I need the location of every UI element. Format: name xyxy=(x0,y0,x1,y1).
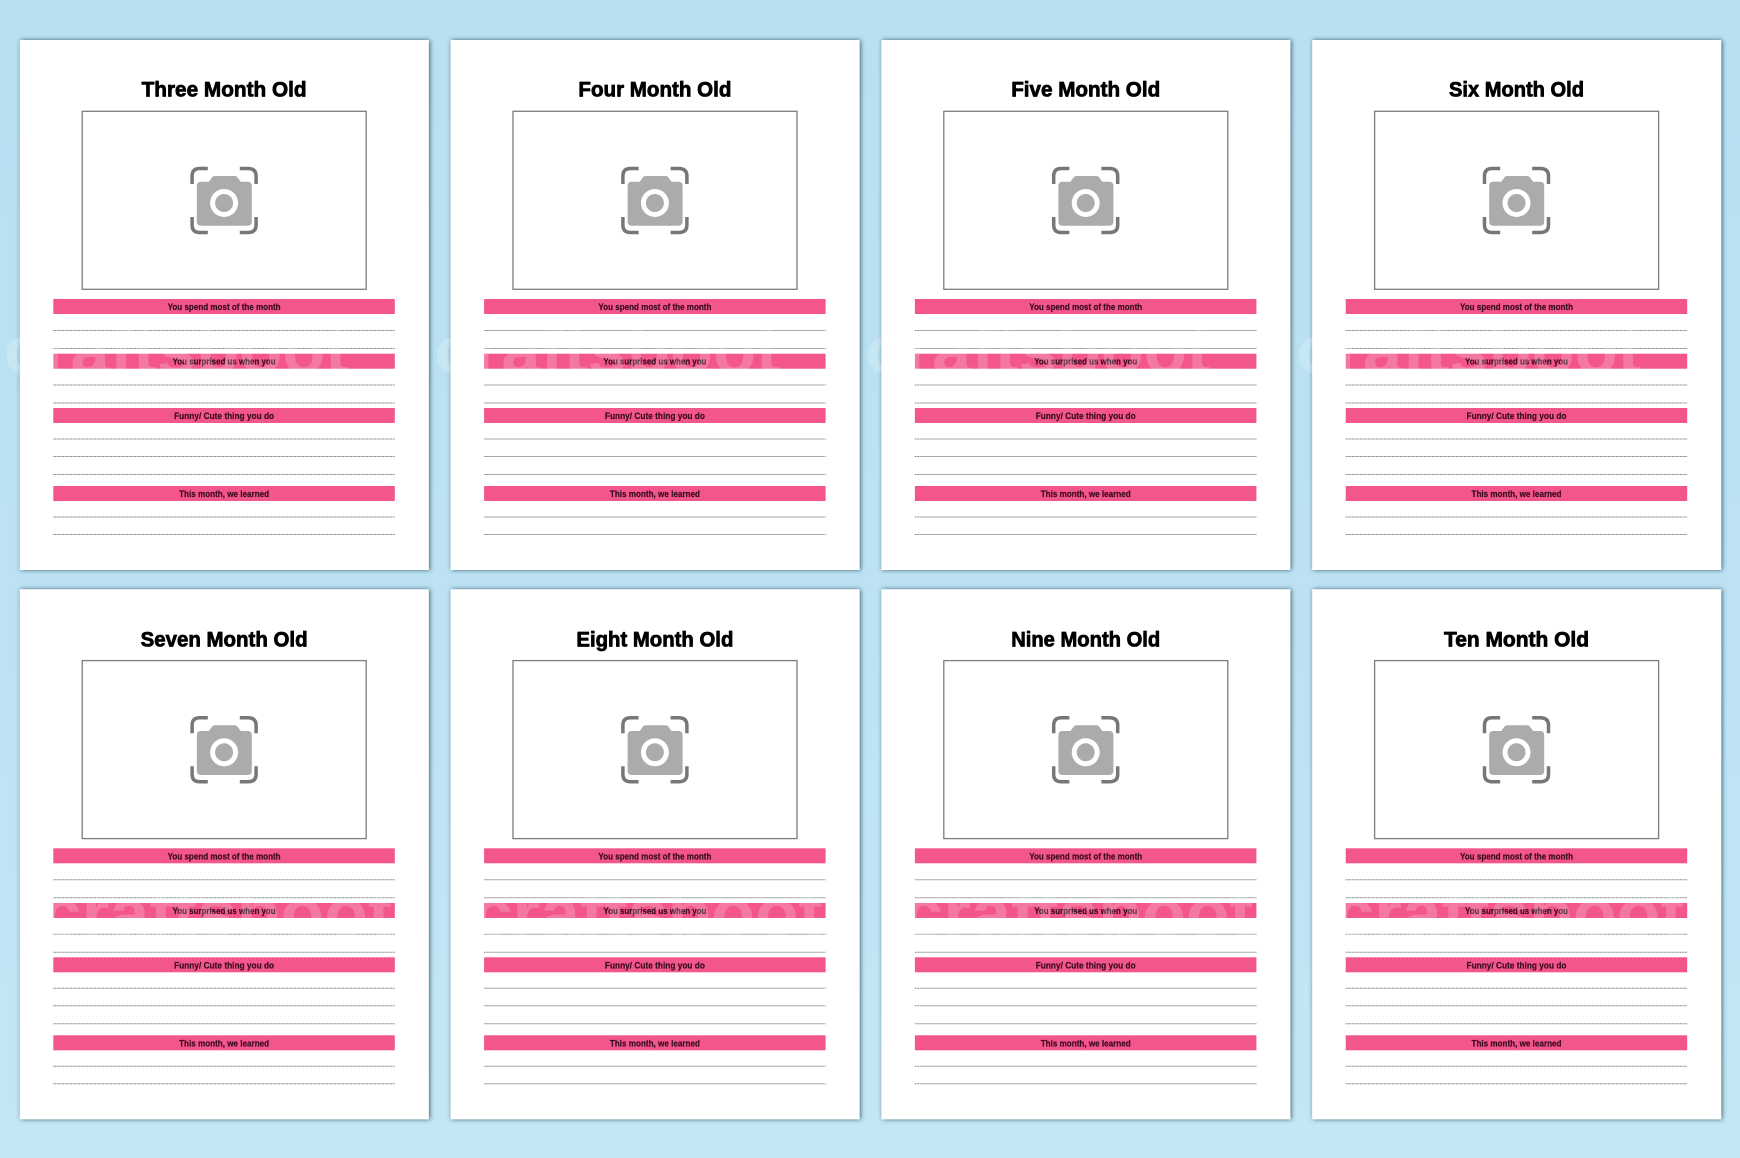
heading: Seven Month Old xyxy=(141,627,308,651)
writing lines xyxy=(53,330,395,348)
section bar: funny or cute thing xyxy=(915,408,1256,423)
section bar: this month we learned: This month, we learned xyxy=(610,1038,700,1049)
watermark: craftsboot xyxy=(4,313,349,387)
section bar: you surprised us when you xyxy=(53,903,395,918)
photo frame xyxy=(513,111,797,289)
section bar: you spend most of the month xyxy=(1346,299,1687,314)
writing lines xyxy=(1346,934,1687,952)
photo frame xyxy=(82,661,366,839)
section bar: funny or cute thing xyxy=(1346,408,1687,423)
section bar: you spend most of the month xyxy=(915,848,1256,863)
section bar: funny or cute thing: Funny/ Cute thing you do xyxy=(174,960,274,971)
section bar: you spend most of the month: You spend most of the month xyxy=(1029,302,1142,313)
section bar: you surprised us when you: You surprised us when you xyxy=(173,906,276,917)
writing lines xyxy=(915,330,1256,348)
writing lines xyxy=(484,439,826,474)
heading: Three Month Old xyxy=(142,78,307,102)
section bar: this month we learned xyxy=(1346,1035,1687,1050)
icon: camera xyxy=(1484,168,1548,232)
writing lines xyxy=(53,934,395,952)
section bar: you surprised us when you: You surprised us when you xyxy=(1465,357,1568,368)
writing lines xyxy=(915,988,1256,1024)
section bar: funny or cute thing: Funny/ Cute thing you do xyxy=(1466,960,1567,971)
section bar: you spend most of the month: You spend most of the month xyxy=(1460,851,1573,862)
writing lines xyxy=(1346,988,1687,1024)
section bar: this month we learned: This month, we learned xyxy=(1471,489,1562,500)
section bar: funny or cute thing: Funny/ Cute thing you do xyxy=(1036,411,1136,422)
icon: camera xyxy=(192,168,256,232)
writing lines xyxy=(915,934,1256,952)
writing lines xyxy=(1346,517,1687,534)
writing lines xyxy=(1346,439,1687,474)
watermark: craftsboot xyxy=(1334,875,1684,949)
section bar: funny or cute thing xyxy=(484,957,826,972)
heading: Nine Month Old xyxy=(1011,627,1160,651)
section bar: you surprised us when you xyxy=(915,354,1256,369)
section bar: funny or cute thing xyxy=(1346,957,1687,972)
section bar: this month we learned: This month, we learned xyxy=(610,489,700,500)
section bar: this month we learned xyxy=(484,1035,826,1050)
icon: camera xyxy=(192,718,256,782)
section bar: this month we learned xyxy=(915,486,1256,501)
section bar: you spend most of the month: You spend most of the month xyxy=(1029,851,1142,862)
watermark: craftsboot xyxy=(473,875,823,949)
section bar: this month we learned: This month, we learned xyxy=(179,489,269,500)
section bar: you spend most of the month: You spend most of the month xyxy=(168,302,281,313)
writing lines xyxy=(1346,1066,1687,1084)
panel: Seven Month Old page xyxy=(20,589,429,1119)
section bar: this month we learned xyxy=(53,1035,395,1050)
photo frame xyxy=(513,661,797,839)
section bar: you spend most of the month xyxy=(1346,848,1687,863)
writing lines xyxy=(484,517,826,534)
writing lines xyxy=(53,439,395,474)
section bar: funny or cute thing: Funny/ Cute thing you do xyxy=(1466,411,1567,422)
panel: Ten Month Old page xyxy=(1312,589,1721,1119)
section bar: you spend most of the month xyxy=(484,299,826,314)
writing lines xyxy=(53,880,395,898)
section bar: you surprised us when you: You surprised us when you xyxy=(1465,906,1568,917)
section bar: this month we learned xyxy=(1346,486,1687,501)
writing lines xyxy=(1346,880,1687,898)
section bar: you surprised us when you xyxy=(1346,354,1687,369)
watermark: craftsboot xyxy=(435,313,780,387)
writing lines xyxy=(484,988,826,1024)
writing lines xyxy=(915,517,1256,534)
photo frame xyxy=(1375,111,1659,289)
watermark: craftsboot xyxy=(903,875,1253,949)
section bar: funny or cute thing xyxy=(53,957,395,972)
section bar: this month we learned xyxy=(915,1035,1256,1050)
section bar: this month we learned: This month, we learned xyxy=(1041,1038,1131,1049)
writing lines xyxy=(53,1066,395,1084)
photo frame xyxy=(944,111,1228,289)
section bar: you surprised us when you: You surprised us when you xyxy=(603,906,707,917)
section bar: you spend most of the month: You spend most of the month xyxy=(1460,302,1573,313)
writing lines xyxy=(484,1066,826,1084)
heading: Ten Month Old xyxy=(1444,627,1589,651)
watermark: craftsboot xyxy=(865,313,1210,387)
icon: camera xyxy=(1054,168,1118,232)
photo frame xyxy=(944,661,1228,839)
panel: Five Month Old page xyxy=(865,40,1290,570)
writing lines xyxy=(53,385,395,403)
writing lines xyxy=(53,517,395,534)
watermark: craftsboot xyxy=(1296,313,1641,387)
section bar: you surprised us when you xyxy=(53,354,395,369)
heading: Eight Month Old xyxy=(576,627,733,651)
section bar: funny or cute thing: Funny/ Cute thing you do xyxy=(605,411,705,422)
section bar: you spend most of the month: You spend most of the month xyxy=(598,302,712,313)
section bar: you spend most of the month xyxy=(53,848,395,863)
panel: Eight Month Old page xyxy=(451,589,860,1119)
writing lines xyxy=(53,988,395,1024)
panel: Four Month Old page xyxy=(435,40,860,570)
writing lines xyxy=(915,1066,1256,1084)
writing lines xyxy=(1346,330,1687,348)
section bar: funny or cute thing xyxy=(53,408,395,423)
writing lines xyxy=(484,330,826,348)
section bar: funny or cute thing: Funny/ Cute thing you do xyxy=(174,411,274,422)
watermark: craftsboot xyxy=(42,875,392,949)
section bar: funny or cute thing xyxy=(484,408,826,423)
writing lines xyxy=(915,439,1256,474)
writing lines xyxy=(484,934,826,952)
writing lines xyxy=(1346,385,1687,403)
section bar: you surprised us when you xyxy=(484,354,826,369)
photo frame xyxy=(1375,661,1659,839)
section bar: you surprised us when you: You surprised us when you xyxy=(1034,357,1137,368)
section bar: you spend most of the month: You spend most of the month xyxy=(168,851,281,862)
icon: camera xyxy=(623,168,687,232)
section bar: you spend most of the month: You spend most of the month xyxy=(598,851,712,862)
section bar: this month we learned: This month, we learned xyxy=(1041,489,1131,500)
section bar: funny or cute thing: Funny/ Cute thing you do xyxy=(1036,960,1136,971)
section bar: you spend most of the month xyxy=(53,299,395,314)
panel: Three Month Old page xyxy=(4,40,429,570)
icon: camera xyxy=(623,718,687,782)
section bar: you spend most of the month xyxy=(484,848,826,863)
section bar: you surprised us when you: You surprised us when you xyxy=(603,357,707,368)
section bar: you surprised us when you xyxy=(484,903,826,918)
section bar: this month we learned: This month, we learned xyxy=(179,1038,269,1049)
section bar: you spend most of the month xyxy=(915,299,1256,314)
section bar: you surprised us when you xyxy=(1346,903,1687,918)
section bar: this month we learned xyxy=(484,486,826,501)
panel: Six Month Old page xyxy=(1296,40,1721,570)
heading: Five Month Old xyxy=(1011,78,1160,102)
writing lines xyxy=(484,385,826,403)
section bar: this month we learned: This month, we learned xyxy=(1471,1038,1562,1049)
section bar: funny or cute thing xyxy=(915,957,1256,972)
heading: Six Month Old xyxy=(1449,78,1584,102)
writing lines xyxy=(484,880,826,898)
icon: camera xyxy=(1484,718,1548,782)
writing lines xyxy=(915,385,1256,403)
section bar: you surprised us when you: You surprised us when you xyxy=(1034,906,1137,917)
section bar: funny or cute thing: Funny/ Cute thing you do xyxy=(605,960,705,971)
heading: Four Month Old xyxy=(578,78,731,102)
section bar: this month we learned xyxy=(53,486,395,501)
photo frame xyxy=(82,111,366,289)
icon: camera xyxy=(1054,718,1118,782)
section bar: you surprised us when you xyxy=(915,903,1256,918)
section bar: you surprised us when you: You surprised us when you xyxy=(173,357,276,368)
panel: Nine Month Old page xyxy=(881,589,1290,1119)
writing lines xyxy=(915,880,1256,898)
